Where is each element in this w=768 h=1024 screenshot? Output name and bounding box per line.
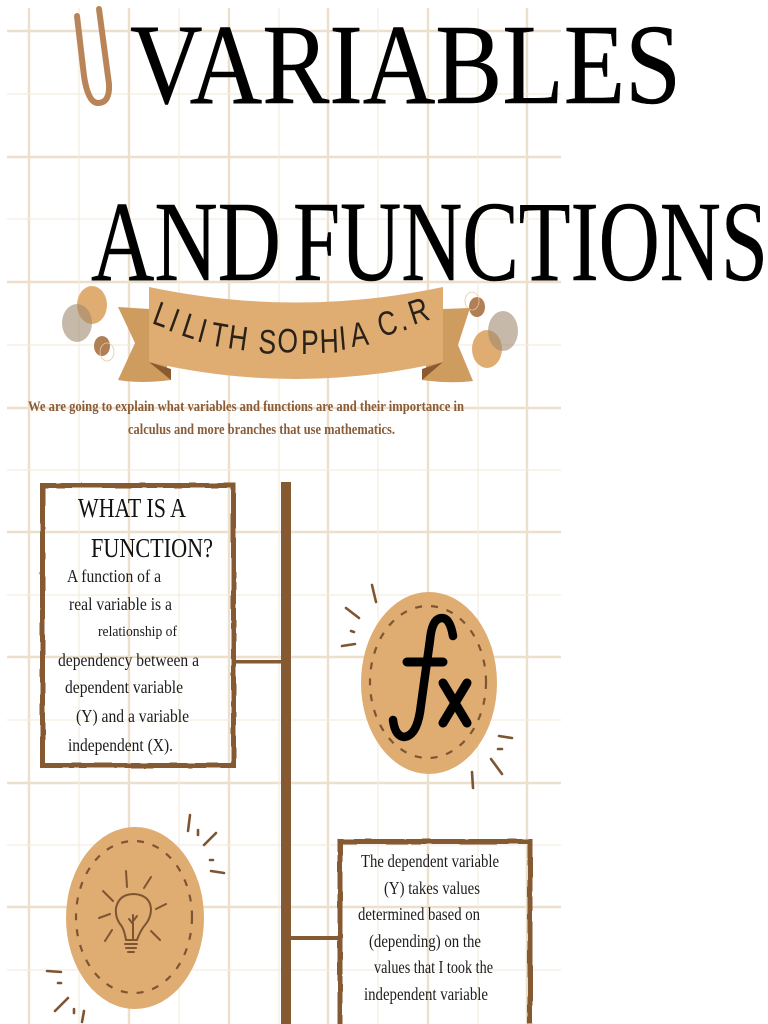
intro text: calculus and more branches that use mathematics. xyxy=(128,422,395,438)
function definition text xyxy=(58,566,199,756)
banner with author name: O xyxy=(277,322,299,361)
function definition text: (Y) and a variable xyxy=(76,706,189,727)
banner with author name: P xyxy=(301,324,319,362)
function definition text: dependency between a xyxy=(58,650,199,670)
function definition text: dependent variable xyxy=(65,677,183,697)
decorative circles: right cluster xyxy=(465,292,518,368)
banner with author name: L xyxy=(178,306,203,347)
dependent variable text xyxy=(358,851,499,1004)
banner with author name: . xyxy=(394,300,411,339)
dependent variable text: determined based on xyxy=(358,904,480,924)
icon: paperclip xyxy=(77,9,109,103)
banner with author name xyxy=(118,287,473,382)
banner with author name: A xyxy=(348,315,371,355)
intro text: We are going to explain what variables and functions are and their importance in xyxy=(28,399,465,415)
dependent variable text: independent variable xyxy=(364,984,488,1004)
connector: timeline to dependent variable box xyxy=(291,936,338,940)
banner with author name: I xyxy=(164,302,184,340)
banner with author name: R xyxy=(404,290,434,332)
dependent variable text: (Y) takes values xyxy=(384,878,480,899)
panel: what is a function xyxy=(42,486,234,766)
function definition text: A function of a xyxy=(67,566,161,586)
decorative circles: left cluster xyxy=(62,286,114,361)
banner with author name: T xyxy=(208,315,230,356)
heading: what is a function xyxy=(78,493,213,563)
banner with author name: S xyxy=(258,323,277,362)
heading: what is a function: WHAT IS A xyxy=(78,493,186,523)
intro text xyxy=(28,399,465,438)
banner with author name: C xyxy=(373,303,402,345)
banner with author name: L xyxy=(148,295,175,335)
title: VARIABLES xyxy=(130,1,681,128)
banner with author name: I xyxy=(337,319,348,358)
function definition text: relationship of xyxy=(98,624,177,640)
heading: what is a function: FUNCTION? xyxy=(91,533,213,563)
dependent variable text: (depending) on the xyxy=(369,931,481,952)
function definition text: independent (X). xyxy=(68,735,173,756)
function definition text: real variable is a xyxy=(69,594,172,614)
timeline vertical bar xyxy=(281,482,291,1024)
dependent variable text: The dependent variable xyxy=(361,851,499,871)
banner with author name: I xyxy=(194,312,211,350)
panel: dependent variable xyxy=(340,842,530,1024)
banner with author name: H xyxy=(319,322,339,361)
dependent variable text: values that I took the xyxy=(374,957,493,977)
title xyxy=(91,1,768,305)
title: AND xyxy=(91,178,281,305)
connector: function box to timeline xyxy=(234,660,282,664)
icon: fx badge xyxy=(342,585,512,788)
banner with author name: H xyxy=(226,318,250,358)
icon: light bulb badge xyxy=(47,815,224,1022)
